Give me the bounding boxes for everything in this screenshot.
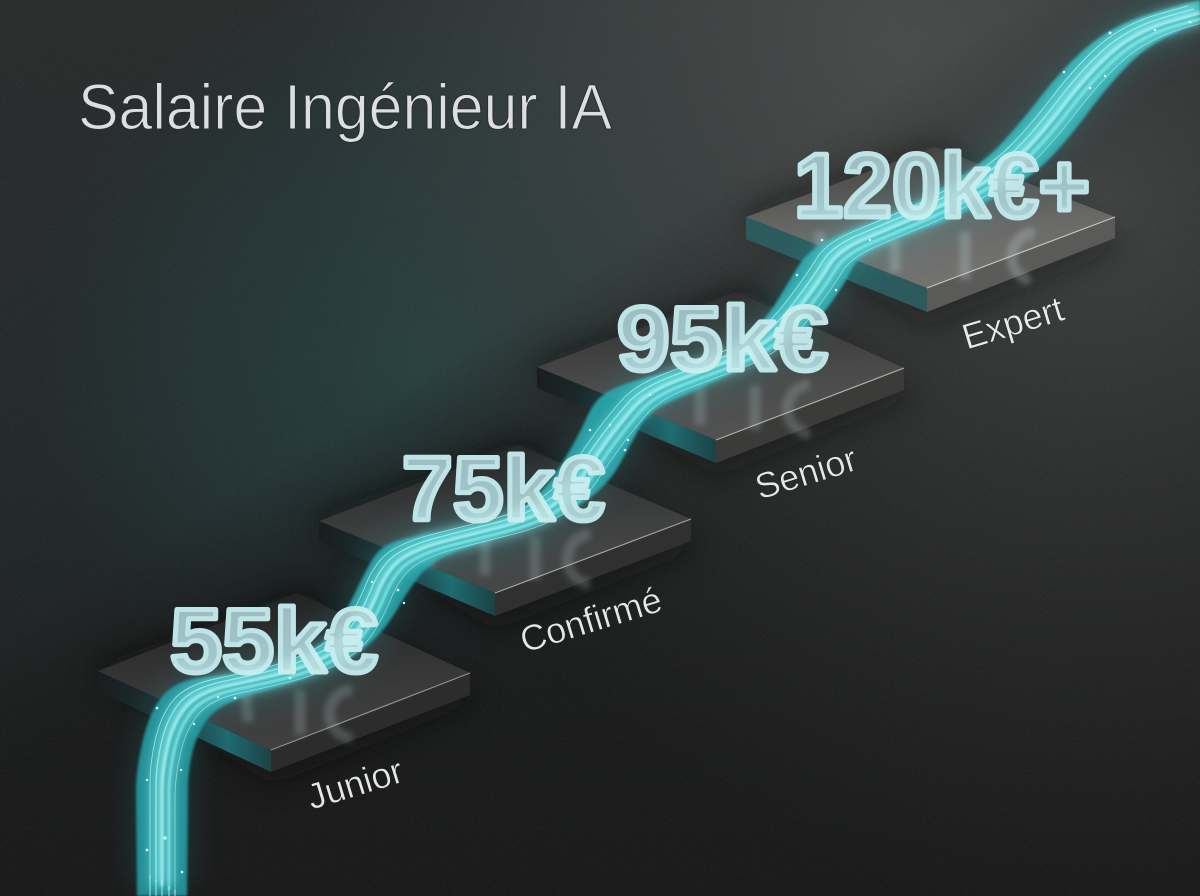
label: Senior: Senior xyxy=(750,438,862,507)
label: Confirmé: Confirmé xyxy=(515,579,667,660)
step: Junior xyxy=(90,590,480,785)
value: 120k€+: 120k€+ xyxy=(794,136,1090,237)
value: 75k€: 75k€ xyxy=(402,439,605,540)
title: Salaire Ingénieur IA xyxy=(78,71,612,143)
step: Expert xyxy=(738,143,1125,326)
reflections of the values on the steps xyxy=(190,232,1035,738)
value: 55k€: 55k€ xyxy=(170,591,378,692)
label: Junior: Junior xyxy=(302,750,408,817)
value: 95k€: 95k€ xyxy=(617,289,828,390)
step: Senior xyxy=(530,288,915,476)
step: Confirmé xyxy=(310,440,700,630)
label: Expert: Expert xyxy=(957,288,1069,357)
